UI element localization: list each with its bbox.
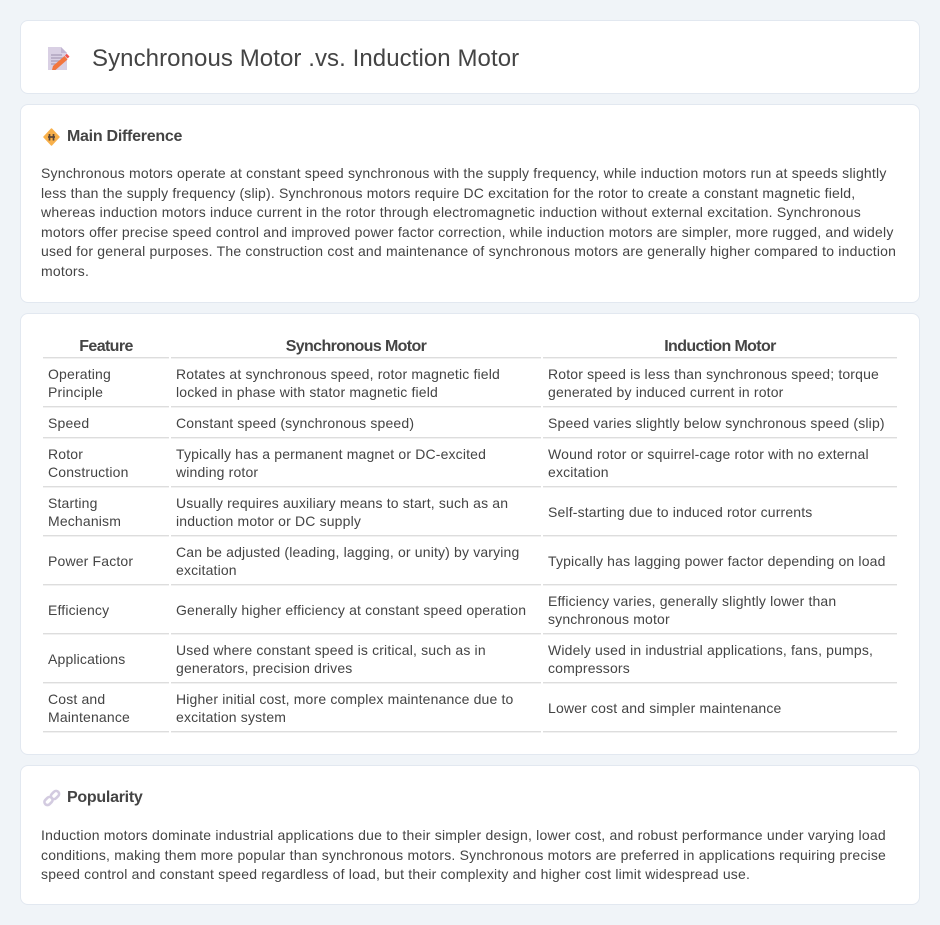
row: starting mechanism: Mechanism bbox=[48, 513, 121, 529]
cell: induction rotor construction: Wound rotor or squirrel-cage rotor with no external bbox=[548, 446, 869, 462]
cell: synchronous operating principle bbox=[176, 366, 500, 400]
cell: induction rotor construction bbox=[548, 446, 869, 480]
cell: induction efficiency bbox=[548, 593, 836, 627]
row: operating principle bbox=[48, 366, 111, 400]
cell: synchronous rotor construction: winding rotor bbox=[176, 464, 258, 480]
row: speed: Speed bbox=[48, 415, 89, 431]
cell: synchronous cost: excitation system bbox=[176, 709, 286, 725]
cell: synchronous cost bbox=[176, 691, 513, 725]
cell: induction applications bbox=[548, 642, 873, 676]
text: popularity body: conditions, making them more popular than synchronous motors. Synchronous motors are preferred in applications requiring precise bbox=[41, 847, 886, 863]
row: cost and maintenance: Cost and bbox=[48, 691, 105, 707]
cell: induction starting mechanism: Self-starting due to induced rotor currents bbox=[548, 504, 812, 520]
text: popularity body: speed control and constant speed regardless of load, but their complexity and higher cost limit widespread use. bbox=[41, 866, 750, 882]
cell: induction applications: compressors bbox=[548, 660, 630, 676]
text: main difference body: motors offer precise speed control and improved power factor correction, while induction motors are simpler, more rugged, and widely bbox=[41, 224, 894, 240]
cell: induction efficiency: Efficiency varies, generally slightly lower than bbox=[548, 593, 836, 609]
row: operating principle: Principle bbox=[48, 384, 103, 400]
table header: induction motor: Induction Motor bbox=[664, 338, 776, 355]
cell: synchronous rotor construction: Typically has a permanent magnet or DC-excited bbox=[176, 446, 486, 462]
cell: synchronous power factor bbox=[176, 544, 519, 578]
cell: induction operating principle: Rotor speed is less than synchronous speed; torque bbox=[548, 366, 879, 382]
cell: induction efficiency: synchronous motor bbox=[548, 611, 670, 627]
cell: synchronous rotor construction bbox=[176, 446, 486, 480]
cell: induction power factor: Typically has lagging power factor depending on load bbox=[548, 553, 886, 569]
text: main difference body: used for general purposes. The construction cost and maintenance of synchronous motors are generally higher compared to induction bbox=[41, 243, 896, 259]
row: applications: Applications bbox=[48, 651, 125, 667]
cell: induction cost: Lower cost and simpler maintenance bbox=[548, 700, 781, 716]
heading: popularity: Popularity bbox=[67, 789, 143, 806]
cell: synchronous applications: Used where constant speed is critical, such as in bbox=[176, 642, 486, 658]
text: main difference body: less than the supply frequency (slip). Synchronous motors require DC excitation for the rotor to create a constant magnetic field, bbox=[41, 185, 855, 201]
panel: header bbox=[20, 20, 920, 94]
text: main difference body: whereas induction motors induce current in the rotor through electromagnetic induction without external excitation. Synchronous bbox=[41, 204, 861, 220]
icon: document with pencil bbox=[48, 47, 70, 70]
cell: induction operating principle: generated by induced current in rotor bbox=[548, 384, 784, 400]
cell: induction applications: Widely used in industrial applications, fans, pumps, bbox=[548, 642, 873, 658]
cell: synchronous operating principle: Rotates at synchronous speed, rotor magnetic field bbox=[176, 366, 500, 382]
text: popularity body bbox=[41, 827, 886, 882]
icon: chain link bbox=[43, 790, 60, 806]
panel: popularity bbox=[20, 765, 920, 905]
cell: synchronous applications bbox=[176, 642, 486, 676]
text: main difference body bbox=[41, 165, 896, 279]
panel: main difference bbox=[20, 104, 920, 303]
cell: synchronous starting mechanism bbox=[176, 495, 508, 529]
cell: induction operating principle bbox=[548, 366, 879, 400]
table header: synchronous motor: Synchronous Motor bbox=[286, 338, 426, 355]
cell: synchronous operating principle: locked in phase with stator magnetic field bbox=[176, 384, 438, 400]
cell: synchronous efficiency: Generally higher efficiency at constant speed operation bbox=[176, 602, 526, 618]
row: operating principle: Operating bbox=[48, 366, 111, 382]
cell: synchronous applications: generators, precision drives bbox=[176, 660, 352, 676]
cell: synchronous starting mechanism: induction motor or DC supply bbox=[176, 513, 361, 529]
row: starting mechanism: Starting bbox=[48, 495, 98, 511]
heading: main difference: Main Difference bbox=[67, 128, 182, 145]
text: popularity body: Induction motors dominate industrial applications due to their simpler design, lower cost, and robust performance under varying load bbox=[41, 827, 886, 843]
cell: synchronous starting mechanism: Usually requires auxiliary means to start, such as an bbox=[176, 495, 508, 511]
title: Synchronous Motor .vs. Induction Motor bbox=[92, 45, 519, 72]
row: power factor: Power Factor bbox=[48, 553, 133, 569]
table header: feature: Feature bbox=[79, 338, 133, 355]
row: cost and maintenance bbox=[48, 691, 130, 725]
row: rotor construction: Rotor bbox=[48, 446, 83, 462]
row: efficiency: Efficiency bbox=[48, 602, 109, 618]
row: starting mechanism bbox=[48, 495, 121, 529]
icon: diamond warning sign bbox=[43, 128, 60, 146]
row: cost and maintenance: Maintenance bbox=[48, 709, 130, 725]
row: rotor construction bbox=[48, 446, 129, 480]
text: main difference body: motors. bbox=[41, 263, 89, 279]
cell: synchronous power factor: excitation bbox=[176, 562, 237, 578]
row: rotor construction: Construction bbox=[48, 464, 129, 480]
cell: synchronous power factor: Can be adjusted (leading, lagging, or unity) by varying bbox=[176, 544, 519, 560]
cell: induction rotor construction: excitation bbox=[548, 464, 609, 480]
text: main difference body: Synchronous motors operate at constant speed synchronous with the supply frequency, while induction motors run at speeds slightly bbox=[41, 165, 887, 181]
panel: comparison table bbox=[20, 313, 920, 755]
cell: induction speed: Speed varies slightly below synchronous speed (slip) bbox=[548, 415, 885, 431]
cell: synchronous speed: Constant speed (synchronous speed) bbox=[176, 415, 414, 431]
cell: synchronous cost: Higher initial cost, more complex maintenance due to bbox=[176, 691, 513, 707]
